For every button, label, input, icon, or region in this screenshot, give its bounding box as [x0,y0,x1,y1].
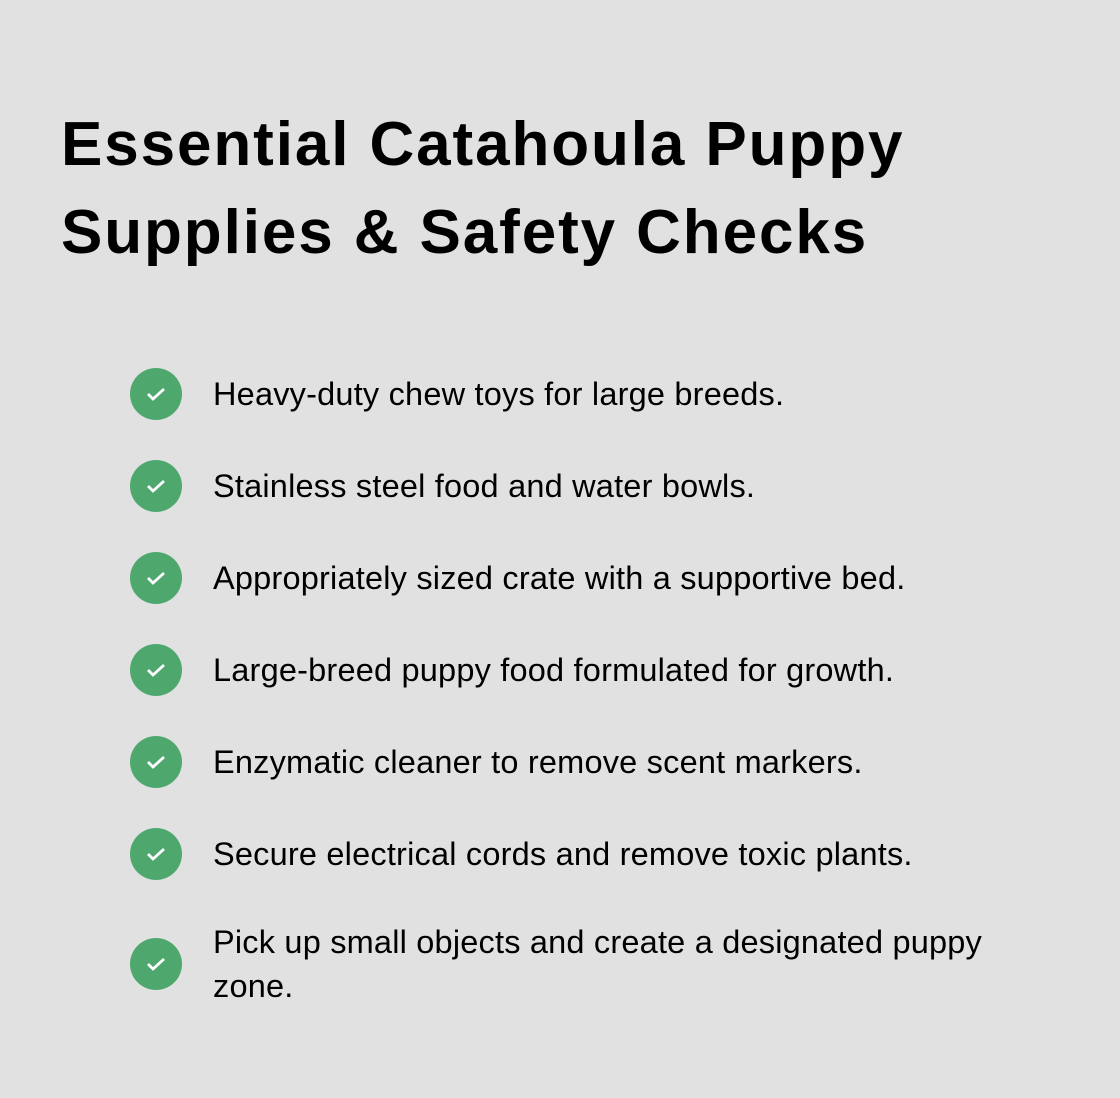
item 2: Stainless steel food and water bowls. [213,468,755,504]
item 4: Large-breed puppy food formulated for growth. [213,652,894,688]
item 7: zone. [213,968,294,1004]
title: Supplies & Safety Checks [61,198,868,267]
item 6 [130,828,913,880]
item 7: Pick up small objects and create a designated puppy [213,924,982,960]
item 3 [130,552,905,604]
item 4 [130,644,894,696]
item 5: Enzymatic cleaner to remove scent markers. [213,744,863,780]
item 2 [130,460,755,512]
item 3: Appropriately sized crate with a supportive bed. [213,560,905,596]
title: Essential Catahoula Puppy [61,110,904,179]
item 5 [130,736,863,788]
item 6: Secure electrical cords and remove toxic plants. [213,836,913,872]
title [61,110,904,267]
item 1 [130,368,784,420]
item 1: Heavy-duty chew toys for large breeds. [213,376,784,412]
item 7 [130,924,982,1004]
